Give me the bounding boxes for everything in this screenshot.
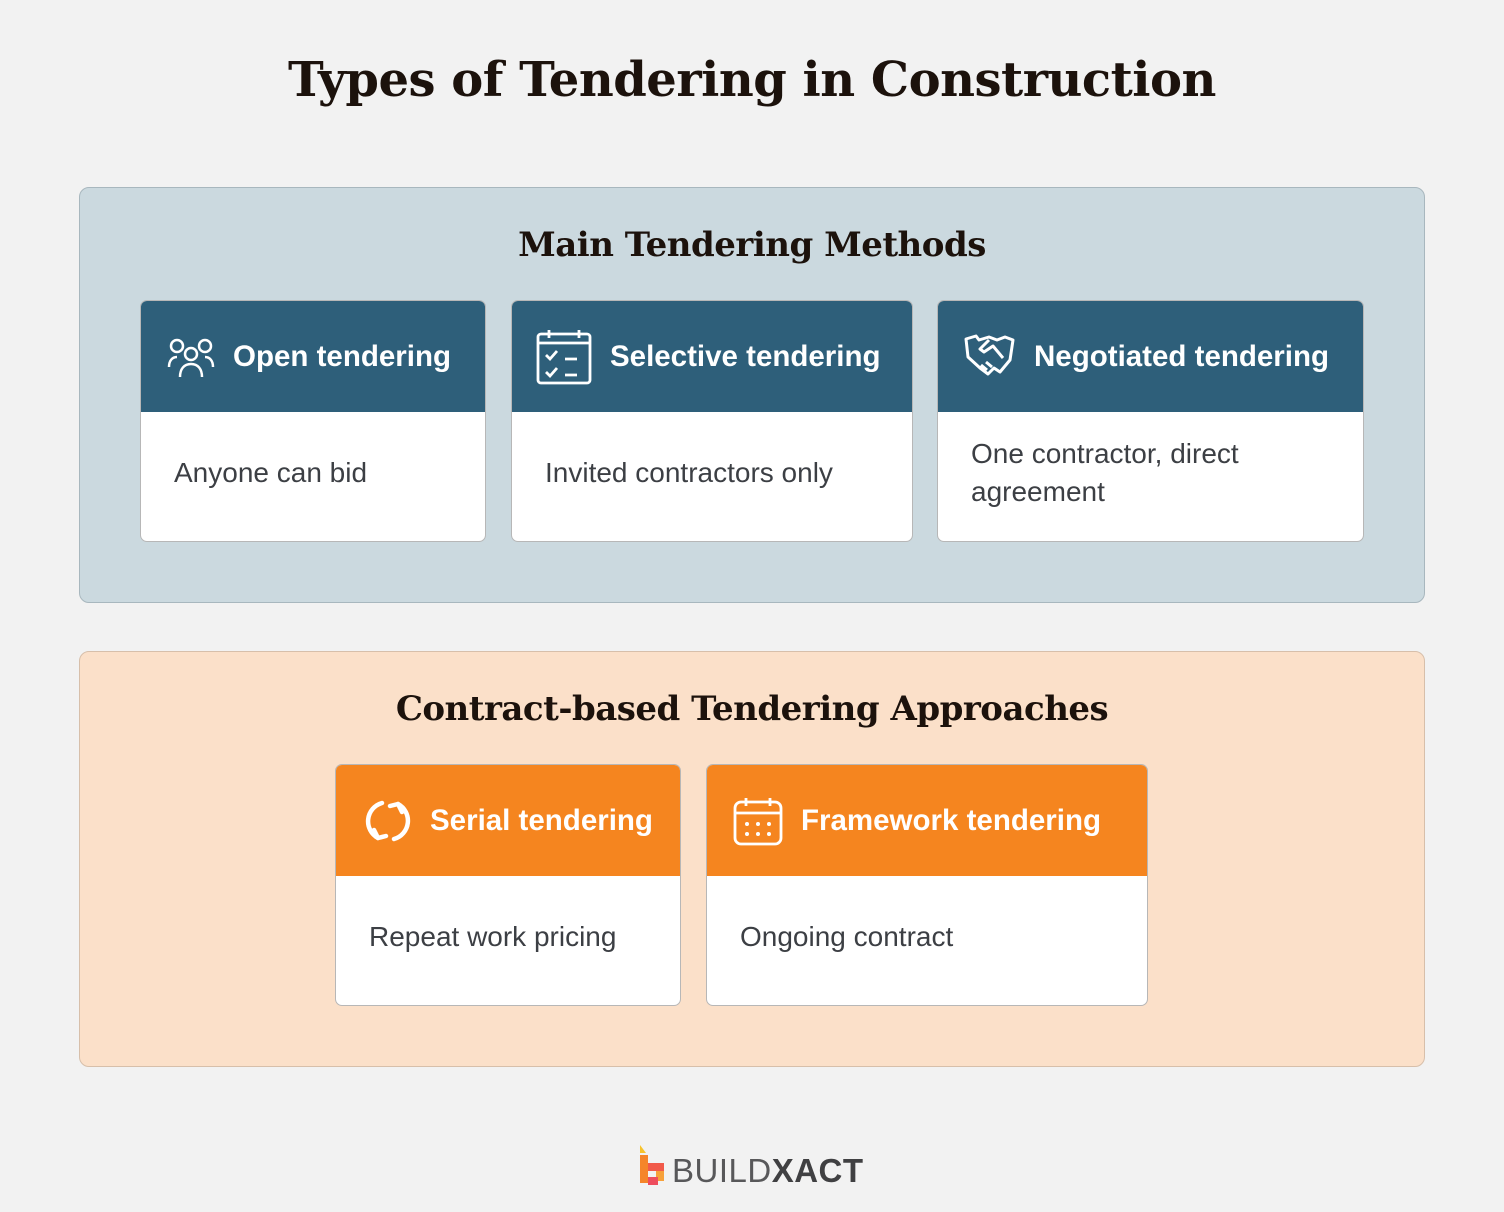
panel: main tendering methods	[79, 187, 1425, 603]
icon: people	[168, 338, 214, 377]
heading: contract-based: Contract-based Tendering Approaches	[396, 689, 1108, 729]
logo: buildxact	[640, 1145, 864, 1189]
text: ongoing contract: Ongoing contract	[740, 921, 953, 952]
card: negotiated tendering	[937, 300, 1364, 542]
title: Types of Tendering in Construction	[288, 52, 1216, 108]
header: selective tendering: Selective tendering	[610, 340, 881, 372]
header: serial tendering	[336, 765, 680, 876]
card: open tendering	[140, 300, 486, 542]
header: framework tendering	[707, 765, 1147, 876]
header: open tendering: Open tendering	[233, 340, 451, 372]
header: framework tendering: Framework tendering	[801, 804, 1101, 836]
text: repeat work pricing: Repeat work pricing	[369, 921, 616, 952]
card: selective tendering	[511, 300, 913, 542]
icon: handshake	[964, 334, 1014, 376]
icon: checklist	[536, 330, 592, 384]
text: one contractor: One contractor, direct agreement	[971, 438, 1239, 507]
header: serial tendering: Serial tendering	[430, 804, 653, 836]
panel: contract-based approaches	[79, 651, 1425, 1067]
header: open tendering	[141, 301, 485, 412]
header: negotiated tendering: Negotiated tendering	[1034, 340, 1329, 372]
text: buildxact: BUILDXACT	[672, 1152, 864, 1189]
card: framework tendering	[706, 764, 1148, 1006]
heading: main tendering methods: Main Tendering Methods	[518, 225, 986, 265]
text: anyone can bid: Anyone can bid	[174, 457, 367, 488]
header: negotiated tendering	[938, 301, 1363, 412]
card: serial tendering	[335, 764, 681, 1006]
icon: logo mark	[640, 1145, 664, 1185]
header: selective tendering	[512, 301, 912, 412]
icon: calendar	[734, 798, 782, 846]
text: invited contractors only: Invited contractors only	[545, 457, 833, 488]
icon: cycle	[366, 800, 410, 842]
